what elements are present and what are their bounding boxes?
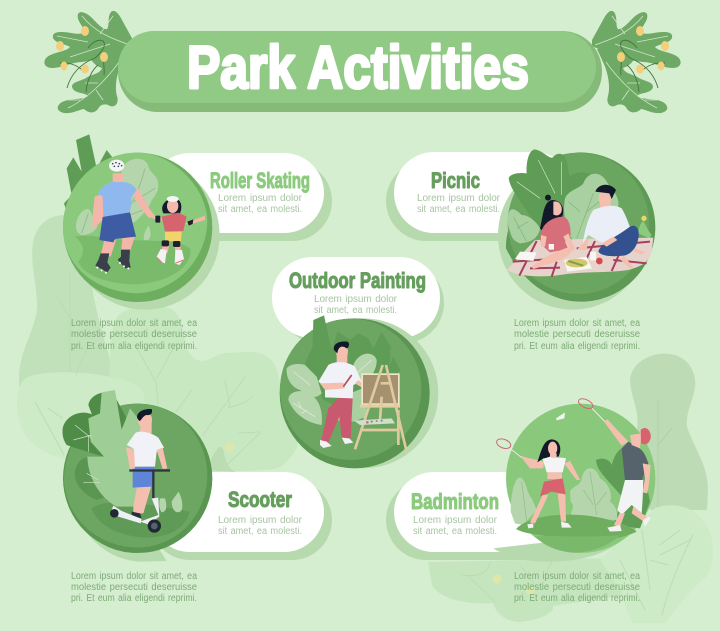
text: outdoor painting caption: Lorem ipsum dolor	[314, 294, 398, 305]
text: scooter caption	[218, 515, 303, 537]
text: roller skating caption	[218, 193, 303, 215]
illustration: outdoor painting	[280, 315, 438, 468]
title: Park Activities	[187, 34, 529, 101]
text: scooter caption: Lorem ipsum dolor	[218, 515, 303, 526]
title banner	[118, 31, 602, 112]
text: picnic description	[514, 318, 640, 352]
text: badminton caption: Lorem ipsum dolor	[413, 515, 498, 526]
text: scooter description: molestie persecuti deseruisse	[71, 582, 197, 593]
text: picnic description: molestie persecuti deseruisse	[514, 329, 640, 340]
text: scooter description	[71, 571, 197, 604]
text: outdoor painting caption	[314, 294, 398, 316]
illustration: badminton	[493, 397, 655, 562]
text: picnic caption: Lorem ipsum dolor	[417, 193, 501, 204]
text: scooter caption: sit amet, ea molesti.	[218, 526, 302, 537]
text: roller skating description: molestie persecuti deseruisse	[71, 329, 197, 340]
illustration: scooter	[62, 390, 212, 562]
text: badminton caption: sit amet, ea molesti.	[413, 526, 497, 537]
text: roller skating description: Lorem ipsum dolor sit amet, ea	[71, 318, 197, 329]
heading: roller skating: Roller Skating	[210, 168, 310, 193]
text: badminton caption	[413, 515, 498, 537]
text: scooter description: Lorem ipsum dolor sit amet, ea	[71, 571, 197, 582]
panel: roller skating callout	[150, 153, 332, 241]
text: badminton description	[514, 571, 640, 604]
text: picnic description: Lorem ipsum dolor sit amet, ea	[514, 318, 640, 329]
panel: scooter callout	[150, 472, 332, 560]
text: badminton description: Lorem ipsum dolor sit amet, ea	[514, 571, 640, 582]
text: picnic caption: sit amet, ea molesti.	[417, 204, 500, 215]
panel: outdoor painting callout	[272, 257, 444, 343]
heading: badminton: Badminton	[411, 489, 499, 514]
text: scooter description: pri. Et eum alia eligendi reprimi.	[71, 593, 197, 604]
text: roller skating description: pri. Et eum alia eligendi reprimi.	[71, 341, 197, 352]
text: badminton description: pri. Et eum alia eligendi reprimi.	[514, 593, 640, 604]
panel: picnic callout	[386, 152, 574, 241]
heading: scooter: Scooter	[228, 487, 292, 512]
background trees and bushes	[17, 215, 713, 623]
text: outdoor painting caption: sit amet, ea molesti.	[314, 305, 397, 316]
text: roller skating caption: sit amet, ea molesti.	[218, 204, 302, 215]
text: roller skating description	[71, 318, 197, 352]
left header leaf cluster	[44, 11, 133, 113]
heading: outdoor painting: Outdoor Painting	[289, 268, 426, 293]
illustration: picnic	[498, 149, 655, 310]
panel: badminton callout	[386, 472, 584, 560]
text: roller skating caption: Lorem ipsum dolor	[218, 193, 303, 204]
text: picnic caption	[417, 193, 501, 215]
text: picnic description: pri. Et eum alia eligendi reprimi.	[514, 341, 640, 352]
illustration: roller skating	[63, 134, 220, 310]
heading: picnic: Picnic	[431, 168, 480, 193]
right header leaf cluster	[592, 11, 681, 113]
text: badminton description: molestie persecuti deseruisse	[514, 582, 640, 593]
